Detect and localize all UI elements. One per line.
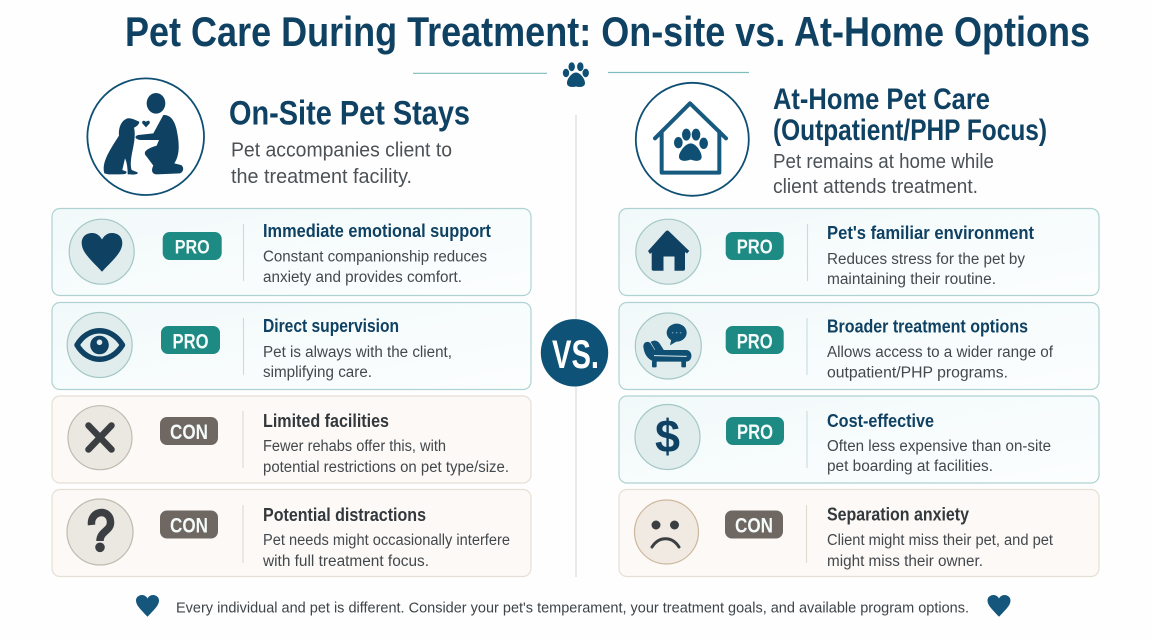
text [827, 223, 1034, 288]
text: simplifying care. [263, 364, 372, 381]
description: the treatment facility. [231, 166, 412, 188]
text: Pet needs might occasionally interfere [263, 532, 510, 549]
badge: con: CON [170, 421, 208, 444]
footer note [136, 595, 1010, 617]
panel: at-home header [636, 83, 1047, 198]
icon: couch with speech bubble [635, 313, 701, 379]
text: Pet is always with the client, [263, 344, 452, 361]
badge: pro [726, 417, 784, 445]
VS badge [541, 319, 608, 386]
heading: At-Home Pet Care [773, 83, 990, 116]
card: direct supervision [52, 302, 531, 390]
text [263, 411, 509, 476]
text: Limited facilities [263, 411, 389, 431]
text: might miss their owner. [827, 553, 983, 570]
badge: pro [161, 326, 220, 354]
title ornament: lines and paw [413, 62, 749, 87]
badge: con [160, 417, 218, 445]
card: pet's familiar environment [619, 208, 1099, 296]
text [263, 221, 491, 286]
badge: con [725, 510, 783, 538]
badge: pro [726, 326, 784, 354]
icon: person and dog [87, 78, 204, 195]
description [231, 140, 452, 188]
badge: pro: PRO [737, 330, 773, 354]
text: Client might miss their pet, and pet [827, 532, 1054, 549]
text [827, 411, 1051, 475]
text: outpatient/PHP programs. [827, 364, 1008, 382]
text: maintaining their routine. [827, 271, 996, 288]
badge: con: CON [735, 514, 773, 538]
heading [773, 83, 1047, 147]
text: pet boarding at facilities. [827, 458, 993, 475]
description: client attends treatment. [773, 176, 978, 198]
icon: house with paw [636, 83, 749, 196]
text: with full treatment focus. [262, 553, 429, 570]
text: Constant companionship reduces [263, 248, 487, 266]
icon: cross [68, 406, 132, 470]
badge: pro: PRO [175, 238, 210, 258]
card: broader treatment options [619, 302, 1099, 390]
text [263, 316, 452, 381]
description: Pet remains at home while [773, 151, 994, 173]
card: limited facilities [52, 396, 531, 483]
icon: left heart [136, 595, 159, 617]
icon: heart [69, 219, 134, 284]
icon: eye [67, 312, 132, 378]
text: anxiety and provides comfort. [263, 269, 462, 286]
badge: pro: PRO [737, 421, 773, 444]
badge: pro [726, 232, 784, 260]
badge: con [160, 510, 218, 538]
text: Immediate emotional support [263, 221, 491, 241]
text: Direct supervision [263, 316, 399, 336]
card: cost-effective [619, 396, 1099, 483]
icon: dollar sign: $ [655, 410, 680, 462]
VS badge: VS. [552, 333, 599, 377]
icon: sad face [634, 500, 698, 564]
text: Often less expensive than on-site [827, 438, 1051, 455]
panel: on-site header [87, 78, 470, 195]
icon: dollar sign [635, 404, 700, 470]
centre divider [575, 115, 577, 577]
text [827, 316, 1054, 382]
card: immediate emotional support [52, 208, 531, 296]
text: Pet's familiar environment [827, 223, 1034, 243]
text: Separation anxiety [827, 504, 969, 524]
heading: (Outpatient/PHP Focus) [773, 114, 1047, 147]
heading: On-Site Pet Stays [229, 94, 470, 132]
badge: pro: PRO [172, 330, 208, 354]
description: Pet accompanies client to [231, 140, 452, 162]
text [262, 505, 510, 570]
text: Cost-effective [827, 411, 934, 431]
badge: pro [163, 232, 222, 260]
description [773, 151, 994, 198]
text: Potential distractions [263, 505, 426, 525]
icon: right heart [988, 595, 1010, 617]
text: Reduces stress for the pet by [827, 251, 1025, 268]
text: Fewer rehabs offer this, with [263, 438, 446, 455]
icon: question mark [67, 499, 133, 565]
card: potential distractions [52, 490, 531, 576]
badge: con: CON [170, 514, 208, 538]
icon: house [636, 219, 701, 284]
footer text: Every individual and pet is different. Consider your pet's temperament, your treatment goals, and available program options. [176, 600, 969, 616]
text: Broader treatment options [827, 316, 1028, 336]
text: potential restrictions on pet type/size. [263, 459, 509, 476]
badge: pro: PRO [737, 236, 773, 258]
text: Allows access to a wider range of [827, 344, 1054, 361]
text [827, 504, 1054, 570]
card: separation anxiety [619, 490, 1099, 576]
